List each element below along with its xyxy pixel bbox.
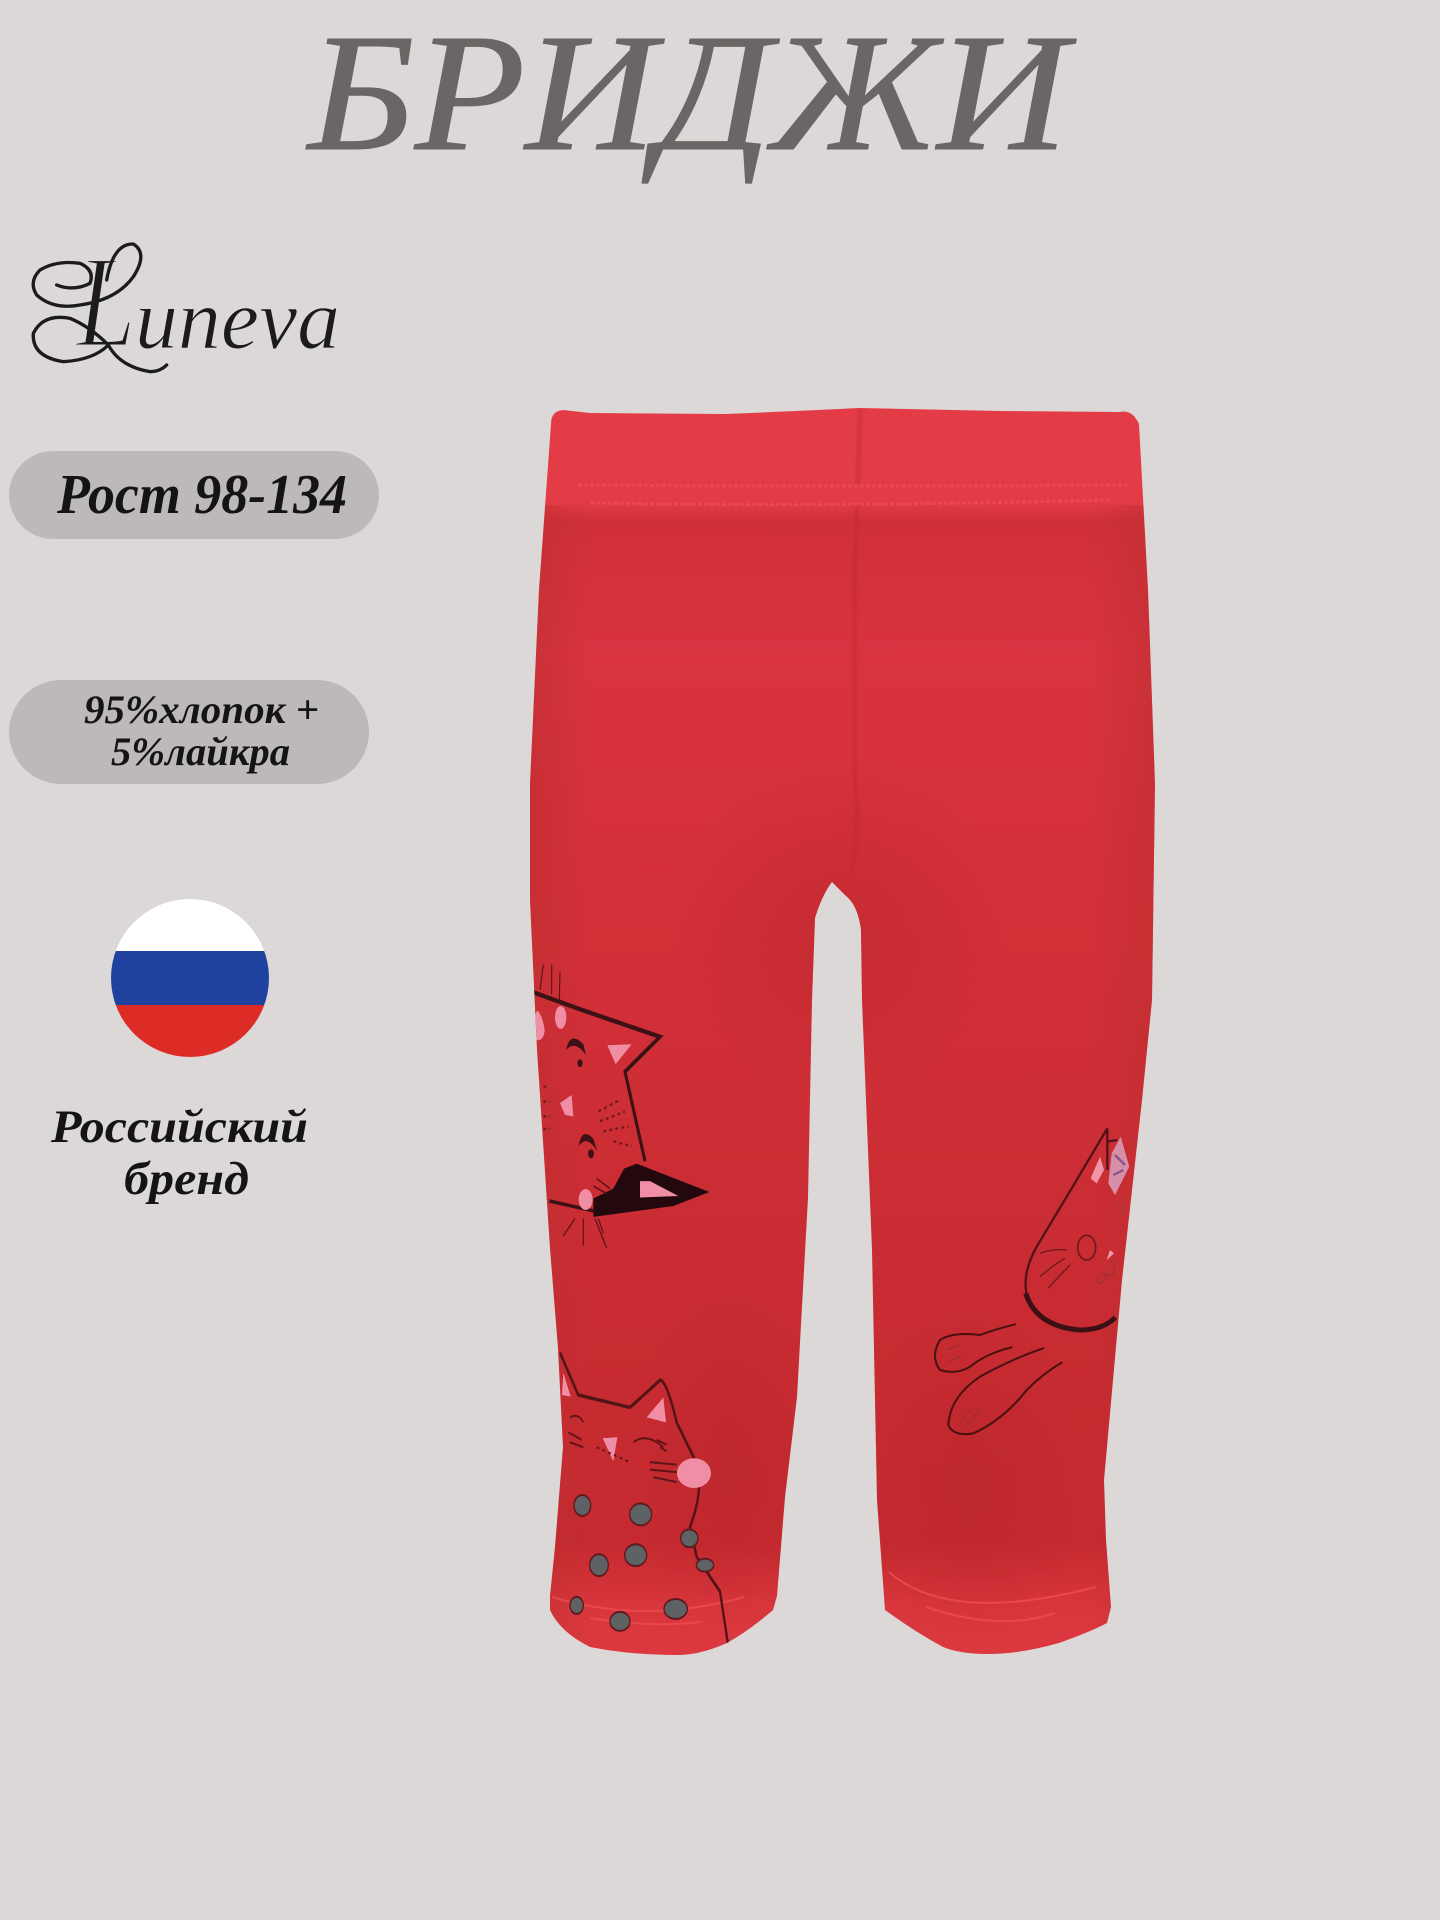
hem stitching	[552, 1572, 1096, 1624]
product: red leggings	[520, 400, 1170, 1670]
title: БРИДЖИ	[306, 0, 1077, 186]
icon: Russian flag	[111, 899, 269, 1057]
pill: composition	[9, 680, 369, 784]
logo: Luneva: L	[74, 228, 136, 375]
cat: lower left on leg	[560, 1353, 728, 1646]
pill: composition: 95%хлопок +	[84, 687, 319, 732]
logo: Luneva	[33, 228, 340, 375]
pill: height: Рост 98-134	[56, 464, 347, 526]
brand caption	[50, 1101, 308, 1205]
cat: upper left on leg	[533, 965, 709, 1248]
waistband stitching	[578, 485, 1130, 504]
brand caption: бренд	[124, 1153, 249, 1205]
logo: Luneva: uneva	[135, 271, 340, 367]
brand caption: Российский	[50, 1101, 308, 1153]
pill: composition: 5%лайкра	[111, 729, 290, 774]
cat: right on leg	[935, 1128, 1129, 1434]
pill: height	[9, 451, 379, 539]
